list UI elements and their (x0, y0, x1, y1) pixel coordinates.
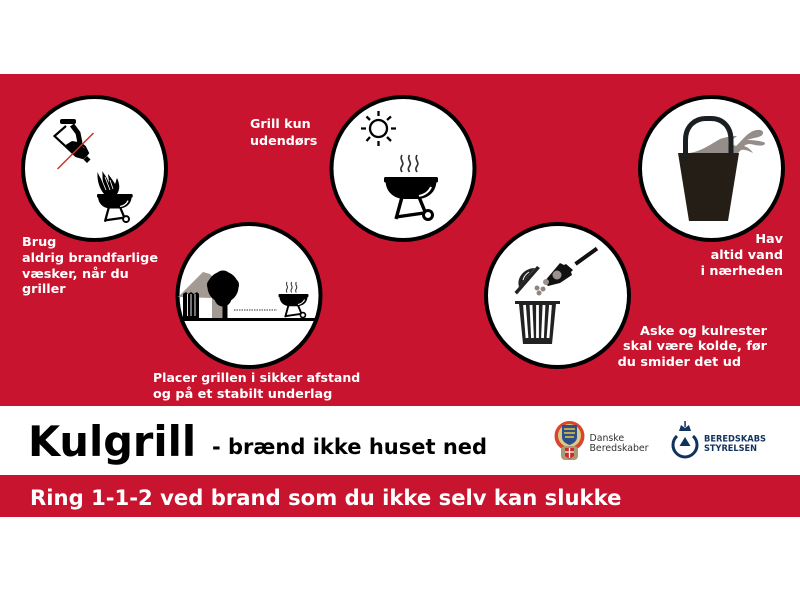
text: caption 2: og på et stabilt underlag (153, 387, 332, 402)
panel: bucket of water (640, 97, 783, 240)
icon: bucket handle (686, 118, 731, 161)
text: caption 3: udendørs (250, 133, 317, 148)
text: caption 4: Aske og kulrester (640, 324, 768, 339)
logo text: Beredskaber (590, 443, 649, 454)
icon: flames (97, 171, 119, 194)
icon: grill (278, 294, 308, 318)
icon: sun (361, 111, 396, 146)
text: caption 5: i nærheden (701, 264, 783, 279)
text: caption 5: altid vand (711, 248, 783, 263)
text: caption 1: griller (22, 282, 66, 297)
text: caption 3: Grill kun (250, 116, 311, 131)
icon: distance arrow (234, 309, 277, 311)
icon: grill (384, 177, 438, 220)
icon: red prohibition line (58, 133, 94, 169)
icon: steam (401, 155, 418, 172)
icon: bucket (678, 153, 739, 221)
circle 2 (178, 224, 320, 367)
panel: safe distance (178, 224, 320, 367)
heading: subtitle: - brænd ikke huset ned (212, 435, 487, 459)
text: caption 1: aldrig brandfarlige (22, 251, 158, 266)
text: caption 4: skal være kolde, før (623, 339, 768, 354)
icon: ash shovel (543, 248, 597, 286)
panel: outdoors (332, 97, 474, 240)
icon: water splash (690, 130, 765, 153)
circle 4 (486, 224, 629, 367)
background: red panel (0, 74, 800, 406)
icon: grill (97, 194, 133, 222)
icon: bottle pouring (54, 119, 91, 163)
icon: steam (286, 282, 297, 293)
icon: ground line (182, 318, 316, 321)
circle 1 (23, 97, 166, 240)
icon: ash falling (535, 286, 546, 295)
icon: fence (183, 292, 199, 318)
logo: Danske Beredskaber (554, 421, 649, 460)
emblem (673, 421, 697, 457)
emblem (554, 421, 584, 460)
logo: Beredskabsstyrelsen (673, 421, 766, 457)
logo text: Danske (590, 433, 624, 444)
circle 3 (332, 97, 474, 240)
footer text: Ring 1-1-2 ved brand som du ikke selv kan slukke (30, 485, 621, 510)
text: caption 1: væsker, når du (22, 267, 129, 282)
text: caption 1: Brug (22, 235, 56, 250)
logo text: STYRELSEN (704, 444, 757, 454)
panel: no flammable liquids (23, 97, 166, 240)
panel: cold ash (486, 224, 629, 367)
footer band (0, 475, 800, 517)
logo text: BEREDSKABS (704, 434, 766, 444)
circle 5 (640, 97, 783, 240)
icon: house silhouette (178, 272, 225, 318)
heading: title: Kulgrill (28, 417, 196, 466)
text: caption 5: Hav (755, 232, 784, 247)
icon: tree (207, 270, 239, 319)
icon: lid (514, 266, 540, 294)
icon: trash can (515, 301, 560, 344)
text: caption 2: Placer grillen i sikker afstand (153, 370, 360, 385)
fence slats (188, 294, 195, 316)
text: caption 4: du smider det ud (618, 355, 741, 370)
